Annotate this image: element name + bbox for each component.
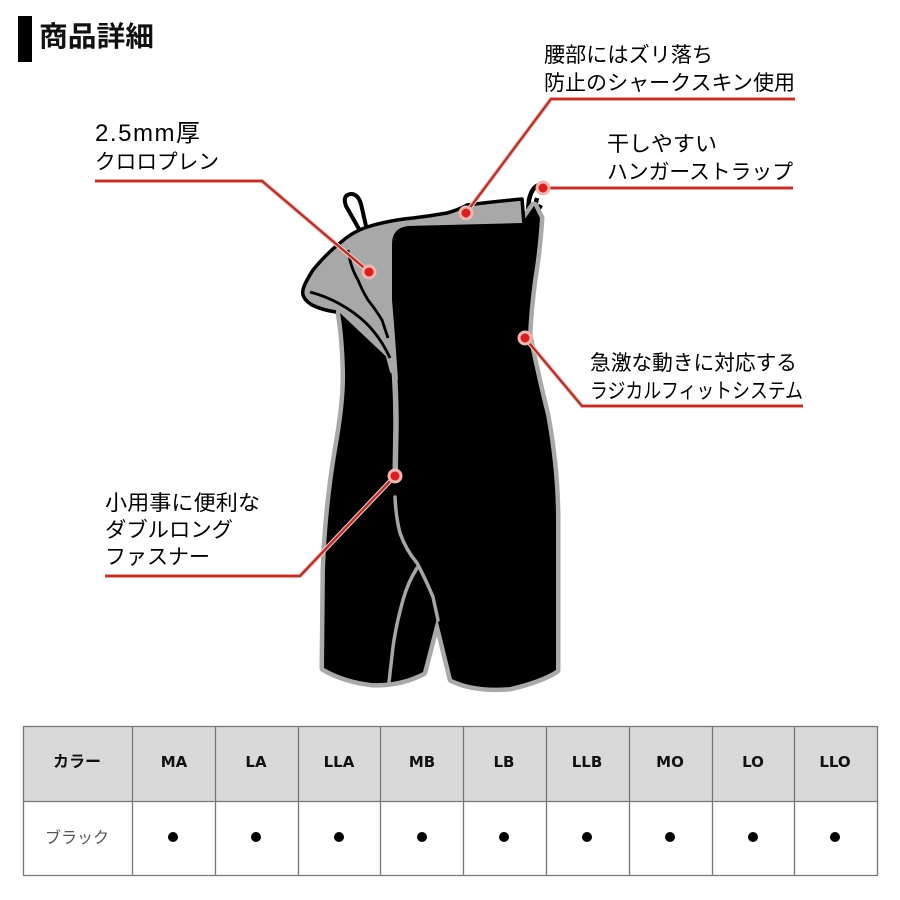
grey suit outline [324, 206, 556, 688]
row label: ブラック [45, 828, 109, 847]
callout: double zipper: ファスナー [105, 546, 210, 569]
callout: double zipper: ダブルロング [105, 519, 233, 542]
table header labels: LLA [324, 753, 355, 771]
table header labels [53, 752, 851, 771]
table header labels: LLB [572, 753, 602, 771]
table grid [23, 726, 878, 876]
callout: shark skin: 腰部にはズリ落ち [544, 44, 713, 67]
front zipper [394, 368, 396, 483]
callout: neoprene: クロロプレン [95, 151, 219, 174]
black suit body [324, 206, 556, 688]
callout: shark skin: 防止のシャークスキン使用 [544, 72, 795, 95]
icon: right hanger strap [527, 185, 541, 222]
grey lining fold [336, 244, 398, 380]
callout: radical fit: 急激な動きに対応する [590, 352, 797, 375]
crotch seams [389, 497, 438, 682]
table header labels: MB [409, 753, 435, 771]
table header labels: LO [742, 753, 764, 771]
availability dots [168, 832, 840, 842]
table header labels: LB [494, 753, 514, 771]
callout: hanger strap [537, 133, 793, 194]
fold edge lines [310, 250, 390, 358]
section heading [18, 16, 154, 62]
table header background [23, 726, 877, 801]
callout: hanger strap: 干しやすい [607, 133, 717, 156]
callout: shark skin [460, 44, 795, 219]
wetsuit illustration [303, 185, 556, 688]
callout: neoprene: 2.5mm厚 [95, 120, 200, 147]
callout: hanger strap: ハンガーストラップ [607, 161, 793, 184]
section heading: 商品詳細 [39, 21, 154, 52]
callout: radical fit: ラジカルフィットシステム [590, 380, 803, 403]
inner lining collar [303, 199, 524, 330]
table header labels: LA [245, 753, 267, 771]
callout: double zipper [105, 470, 401, 576]
table header labels: カラー [53, 752, 101, 771]
callout: radical fit [519, 332, 803, 406]
table header labels: MO [656, 753, 684, 771]
callout: double zipper: 小用事に便利な [105, 492, 260, 515]
icon: left hanger loop [345, 194, 366, 229]
table header labels: MA [161, 753, 188, 771]
callout: neoprene [95, 120, 375, 278]
collar outer edge [303, 199, 524, 312]
size and colour table [23, 726, 878, 876]
table header labels: LLO [819, 753, 851, 771]
